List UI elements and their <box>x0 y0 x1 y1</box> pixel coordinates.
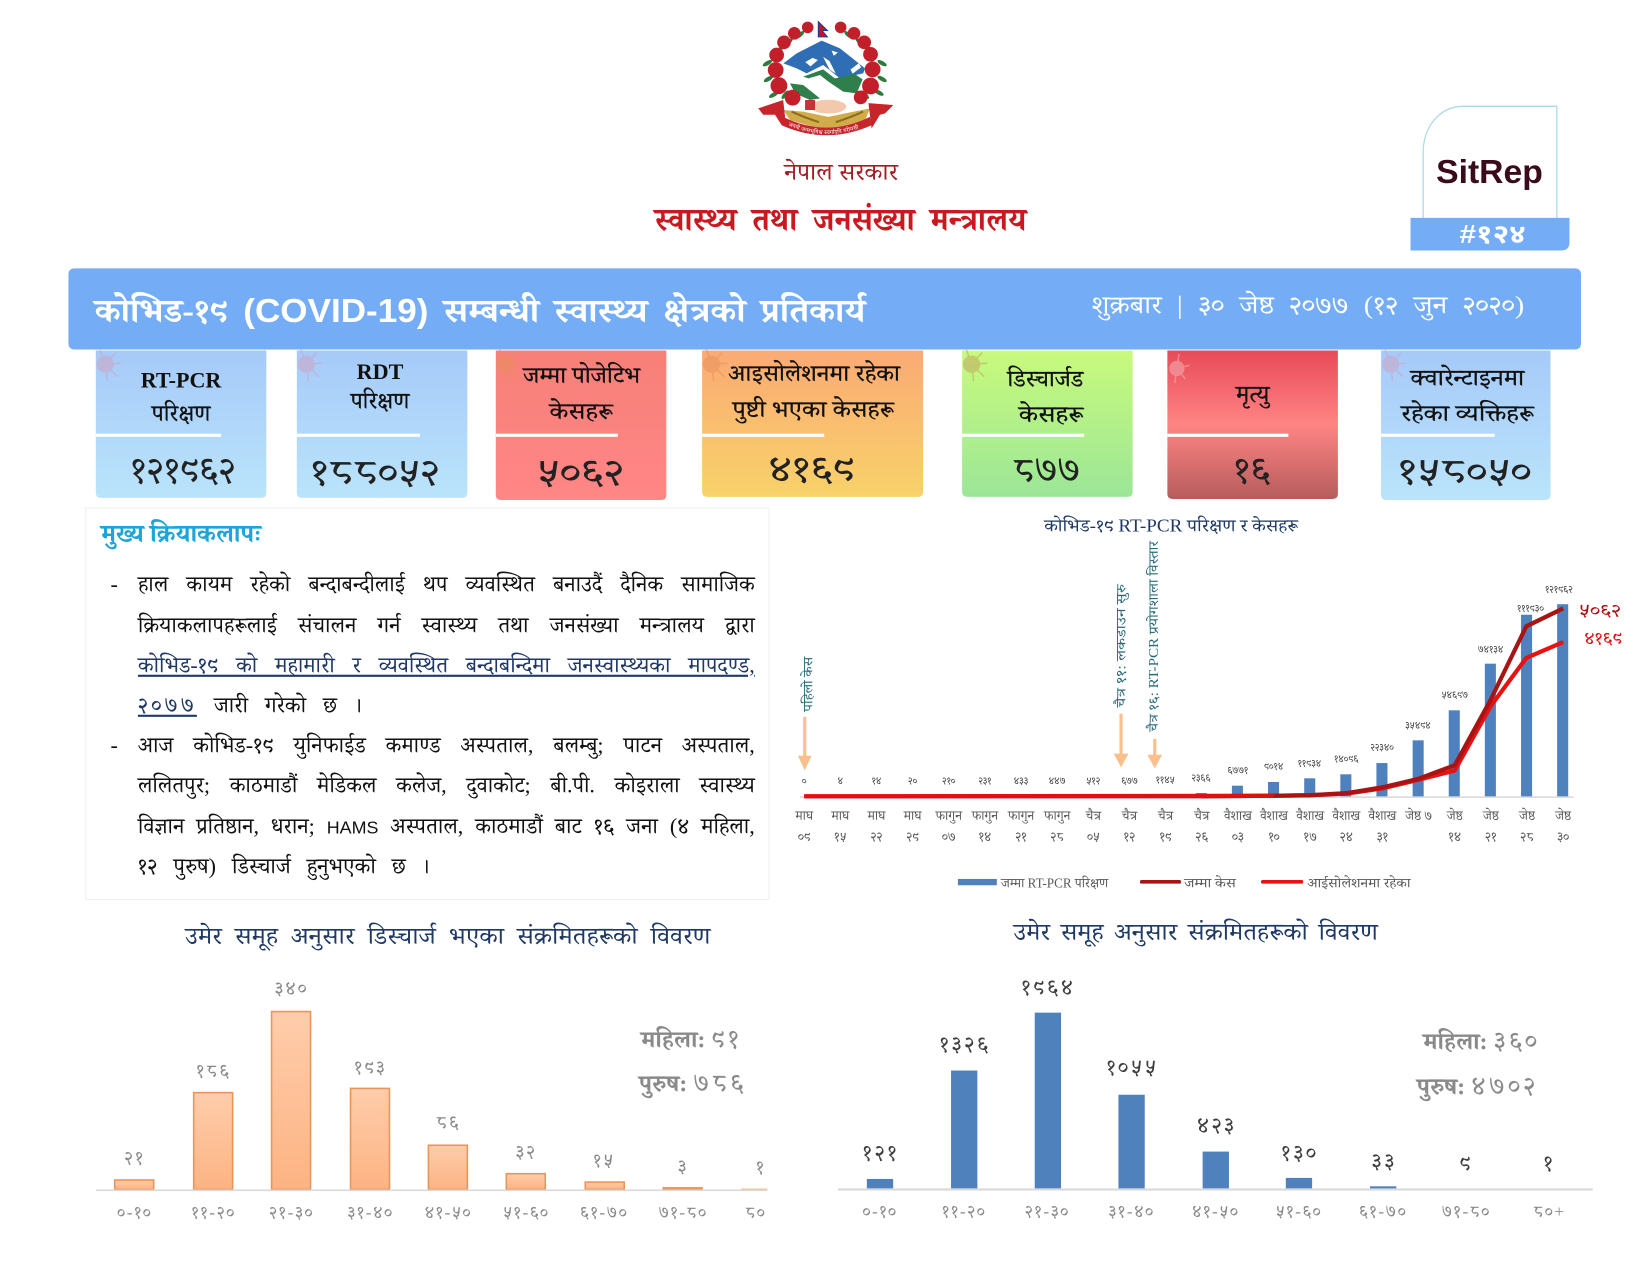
x axis categories: २१ <box>1485 829 1497 844</box>
x axis categories: १५ <box>834 829 847 844</box>
value labels: १ <box>756 1158 766 1179</box>
age categories: ७१-८० <box>1442 1202 1491 1221</box>
text block: activity two: - <box>111 733 118 758</box>
bar value labels <box>802 585 1573 787</box>
x axis categories: १० <box>1268 829 1280 844</box>
text block: activity two: विज्ञान प्रतिष्ठान, धरान; HAMS अस्पताल, काठमाडौं बाट १६ जना (४ महिला, <box>138 814 755 839</box>
text block: activity one: हाल कायम रहेको बन्दाबन्दीलाई थप व्यवस्थित बनाउदैं दैनिक सामाजिक <box>138 572 755 597</box>
bar value labels: १११९३० <box>1517 604 1544 615</box>
bars <box>867 1013 1396 1188</box>
badge: SitRep number: #१२४ <box>1459 219 1526 249</box>
panel: quarantine card <box>1381 349 1551 500</box>
x axis categories: वैशाख <box>1295 808 1325 823</box>
value labels: ३३ <box>1371 1148 1397 1173</box>
bars <box>115 1012 767 1189</box>
bars: cumulative RT-PCR tests <box>1196 604 1568 797</box>
x axis categories: जेष्ठ <box>1446 808 1464 823</box>
bar value labels: ५४६९७ <box>1441 690 1468 701</box>
panel: discharged cases card: केसहरू <box>1018 400 1084 428</box>
value labels: ३४० <box>275 979 309 1000</box>
bar value labels: ७४१३४ <box>1478 645 1503 656</box>
value labels: १५ <box>593 1150 615 1171</box>
annotation: lockdown start: चैत्र ११: लकडाउन सुरु <box>1113 583 1129 709</box>
age categories: २१-३० <box>269 1203 314 1222</box>
bar value labels: २३६६ <box>1191 773 1211 784</box>
arrow: lab expansion <box>1147 739 1162 768</box>
x axis categories: ३१ <box>1377 829 1388 844</box>
age categories: ४१-५० <box>425 1203 472 1222</box>
text block: activity one: २०७७ जारी गरेको छ । <box>138 693 362 718</box>
x axis categories: फागुन <box>1007 808 1036 824</box>
bar value labels: ११४५ <box>1156 775 1175 786</box>
x axis categories: २२ <box>870 829 883 844</box>
x axis categories: १४ <box>1448 829 1461 844</box>
value labels: १९६४ <box>1021 975 1076 1000</box>
panel: RT-PCR tests card: RT-PCR <box>141 367 222 392</box>
value labels: १०५५ <box>1106 1055 1159 1080</box>
panel: isolation cases card: आइसोलेशनमा रहेका <box>728 359 901 387</box>
x axis categories: वैशाख <box>1223 808 1253 823</box>
panel: RT-PCR tests card: १२१९६२ <box>131 449 236 490</box>
value labels: ३२ <box>516 1142 537 1163</box>
age categories: २१-३० <box>1025 1202 1070 1221</box>
bar value labels: २२३४० <box>1370 743 1394 754</box>
value labels: १३२६ <box>940 1032 991 1057</box>
badge: SitRep number <box>1411 106 1569 251</box>
age categories: ८० <box>745 1203 766 1222</box>
panel: deaths card: मृत्यु <box>1235 381 1271 409</box>
x axis categories: २९ <box>906 829 919 844</box>
panel: RT-PCR tests card <box>96 349 266 498</box>
value labels: २१ <box>124 1148 145 1169</box>
bar value labels: ० <box>802 776 807 787</box>
x axis categories: फागुन <box>971 808 999 824</box>
icon: national emblem of Nepal <box>758 20 894 136</box>
bar value labels: ६७७१ <box>1228 766 1248 777</box>
panel: title banner <box>68 268 1581 349</box>
legend: जम्मा केस <box>1183 875 1238 890</box>
panel: quarantine card: १५८०५० <box>1398 450 1532 491</box>
value labels: ४२३ <box>1197 1113 1237 1138</box>
gender totals: महिला: ९१ <box>639 1024 742 1053</box>
age categories: ५१-६० <box>503 1203 550 1222</box>
line: isolation cases <box>804 642 1563 796</box>
x axis categories: जेष्ठ <box>1482 808 1500 823</box>
bar value labels: २१० <box>942 776 956 787</box>
age categories: ५१-६० <box>1276 1202 1322 1221</box>
value labels <box>863 975 1555 1176</box>
value labels: १३० <box>1281 1140 1319 1165</box>
x axis categories: फागुन <box>1043 808 1072 824</box>
x axis categories: २६ <box>1195 829 1208 844</box>
gender totals: पुरुष: ४७०२ <box>1415 1072 1538 1101</box>
x axis categories: माघ <box>830 808 850 823</box>
x axis categories: वैशाख <box>1331 808 1362 823</box>
bar value labels: २० <box>908 776 918 787</box>
series end values <box>1579 600 1622 648</box>
x axis categories: वैशाख <box>1259 808 1289 823</box>
age categories: ६१-७० <box>1359 1202 1407 1221</box>
panel: discharged cases card: ८७७ <box>1013 449 1080 490</box>
text block: activity two: आज कोभिड-१९ युनिफाईड कमाण्ड अस्पताल, बलम्बु; पाटन अस्पताल, <box>138 733 755 758</box>
panel: total positive cases card: केसहरू <box>548 397 614 425</box>
legend <box>958 875 1411 890</box>
x axis categories: २१ <box>1015 829 1027 844</box>
legend: आईसोलेशनमा रहेका <box>1307 875 1411 890</box>
arrow: lockdown start <box>1114 714 1128 767</box>
panel: RDT tests card: १८८०५२ <box>311 451 440 492</box>
panel: title banner: शुक्रबार | ३० जेष्ठ २०७७ (१२ जुन २०२०) <box>1092 291 1524 322</box>
x axis categories: ०९ <box>798 829 811 844</box>
value labels: १९३ <box>354 1058 387 1079</box>
bar value labels: ११९३४ <box>1298 758 1321 769</box>
x axis categories <box>794 808 1572 844</box>
chart: discharged by age group <box>96 922 767 1222</box>
x axis categories: ०५ <box>1087 829 1100 844</box>
chart title: उमेर समूह अनुसार डिस्चार्ज भएका संक्रमितहरूको विवरण <box>184 922 712 951</box>
bar value labels: १२१९६२ <box>1545 585 1573 596</box>
age categories <box>117 1203 766 1222</box>
age categories: ३१-४० <box>1108 1202 1155 1221</box>
gender totals: पुरुष: ७८६ <box>637 1069 747 1098</box>
series end values: ४१६९ <box>1584 628 1622 648</box>
x axis categories: जेष्ठ <box>1554 808 1572 823</box>
chart title: उमेर समूह अनुसार संक्रमितहरूको विवरण <box>1013 918 1379 947</box>
panel: RDT tests card <box>297 349 467 498</box>
value labels <box>124 979 766 1179</box>
value labels: १ <box>1543 1151 1555 1176</box>
x axis categories: ०७ <box>942 829 956 844</box>
text block: activity one: - <box>111 572 118 597</box>
panel: total positive cases card: ५०६२ <box>537 451 624 492</box>
x axis categories: ३० <box>1557 829 1569 844</box>
x axis categories: २८ <box>1520 829 1534 844</box>
x axis categories: चैत्र <box>1157 808 1175 823</box>
x axis categories: माघ <box>867 808 886 823</box>
axis line <box>96 1189 767 1191</box>
x axis categories: चैत्र <box>1121 808 1138 823</box>
panel: quarantine card: रहेका व्यक्तिहरू <box>1400 399 1535 427</box>
heading: government name: नेपाल सरकार <box>783 158 900 186</box>
x axis categories: २८ <box>1050 829 1064 844</box>
panel: isolation cases card: ४१६९ <box>768 448 855 489</box>
bar value labels: ४४७ <box>1049 776 1066 787</box>
panel: title banner: कोभिड-१९ (COVID-19) सम्बन्धी स्वास्थ्य क्षेत्रको प्रतिकार्य <box>92 291 868 330</box>
annotation: lab expansion: चैत्र १६: RT-PCR प्रयोगशाला विस्तार <box>1146 540 1161 733</box>
x axis categories: वैशाख <box>1367 808 1398 823</box>
text block: activity two <box>111 732 756 880</box>
annotation: first case: पहिलो केस <box>801 655 816 713</box>
panel: deaths card <box>1167 351 1338 499</box>
series end values: ५०६२ <box>1579 600 1621 620</box>
age categories: ८०+ <box>1533 1202 1566 1221</box>
value labels: ३ <box>678 1157 689 1178</box>
gender totals <box>637 1024 747 1098</box>
heading: ministry name: स्वास्थ्य तथा जनसंख्या मन्त्रालय <box>653 202 1029 239</box>
value labels: १८६ <box>196 1061 231 1082</box>
panel: total positive cases card <box>496 349 666 500</box>
value labels: १२१ <box>863 1140 899 1165</box>
x axis categories: १९ <box>1159 829 1172 844</box>
bar value labels: ९०१४ <box>1264 761 1283 772</box>
age categories: ०-१० <box>117 1203 152 1222</box>
x axis categories: २४ <box>1340 829 1353 844</box>
line: early case baseline <box>804 794 1274 798</box>
chart: infected by age group <box>838 918 1593 1221</box>
age categories: ३१-४० <box>347 1203 394 1222</box>
panel: discharged cases card: डिस्चार्जड <box>1006 364 1084 392</box>
bar value labels: १४०९६ <box>1334 754 1358 765</box>
legend: जम्मा RT-PCR परिक्षण <box>1000 875 1109 890</box>
panel: isolation cases card <box>702 349 923 497</box>
value labels: ९ <box>1459 1151 1473 1176</box>
x axis categories: १२ <box>1124 829 1135 844</box>
panel: deaths card: १६ <box>1234 449 1271 490</box>
chart: RT-PCR tests and cases <box>794 516 1622 890</box>
age categories: ७१-८० <box>659 1203 708 1222</box>
axis line <box>800 796 1574 798</box>
bar value labels: १४ <box>872 776 881 787</box>
panel: quarantine card: क्वारेन्टाइनमा <box>1409 363 1526 391</box>
line: total cases <box>1201 608 1563 796</box>
age categories: ०-१० <box>862 1202 898 1221</box>
badge: SitRep number: SitRep <box>1436 154 1543 191</box>
value labels: ८६ <box>436 1112 461 1133</box>
text block: activity one <box>111 571 756 718</box>
x axis categories: जेष्ठ ७ <box>1404 808 1432 823</box>
panel: main activities <box>85 507 769 900</box>
bar value labels: ३५४९४ <box>1405 720 1431 731</box>
x axis categories: जेष्ठ <box>1518 808 1536 823</box>
age categories: ४१-५० <box>1192 1202 1239 1221</box>
age categories: ११-२० <box>192 1203 236 1222</box>
age categories <box>862 1202 1566 1221</box>
x axis categories: माघ <box>794 808 814 823</box>
x axis categories: फागुन <box>935 808 963 824</box>
axis line <box>838 1188 1593 1191</box>
panel: RDT tests card: RDT <box>357 359 404 384</box>
bar value labels: ४ <box>838 776 843 787</box>
bar value labels: ५१२ <box>1086 776 1101 787</box>
x axis categories: १७ <box>1304 829 1317 844</box>
heading: main activities: मुख्य क्रियाकलापः <box>101 521 261 548</box>
arrow: first case <box>798 717 812 771</box>
panel: total positive cases card: जम्मा पोजेटिभ <box>522 361 642 389</box>
age categories: ६१-७० <box>580 1203 628 1222</box>
bar value labels: ४३३ <box>1014 776 1029 787</box>
bar value labels: ६७७ <box>1121 776 1138 787</box>
text block: activity two: १२ पुरुष) डिस्चार्ज हुनुभएको छ । <box>138 854 430 879</box>
gender totals: महिला: ३६० <box>1421 1026 1540 1055</box>
bar value labels: २३१ <box>978 776 992 787</box>
age categories: ११-२० <box>942 1202 986 1221</box>
gender totals <box>1415 1026 1540 1101</box>
x axis categories: १४ <box>979 829 991 844</box>
panel: isolation cases card: पुष्टी भएका केसहरू <box>732 395 895 424</box>
panel: discharged cases card <box>962 349 1133 497</box>
panel: RDT tests card: परिक्षण <box>350 386 411 414</box>
chart title: कोभिड-१९ RT-PCR परिक्षण र केसहरू <box>1043 516 1299 536</box>
x axis categories: चैत्र <box>1193 808 1211 823</box>
text block: activity one: कोभिड-१९ को महामारी र व्यवस्थित बन्दाबन्दिमा जनस्वास्थ्यका मापदण्ड, <box>138 653 755 678</box>
text block: activity two: ललितपुर; काठमाडौं मेडिकल कलेज, दुवाकोट; बी.पी. कोइराला स्वास्थ्य <box>138 773 755 798</box>
icon: national emblem of Nepal: जननी जन्मभूमिश्च स्वर्गादपि गरीयसी <box>789 122 858 134</box>
x axis categories: चैत्र <box>1085 808 1102 823</box>
x axis categories: माघ <box>903 808 922 823</box>
x axis categories: ०३ <box>1232 829 1244 844</box>
text block: activity one: क्रियाकलापहरूलाई संचालन गर्न स्वास्थ्य तथा जनसंख्या मन्त्रालय द्वारा <box>138 613 755 638</box>
panel: RT-PCR tests card: परिक्षण <box>151 399 212 427</box>
